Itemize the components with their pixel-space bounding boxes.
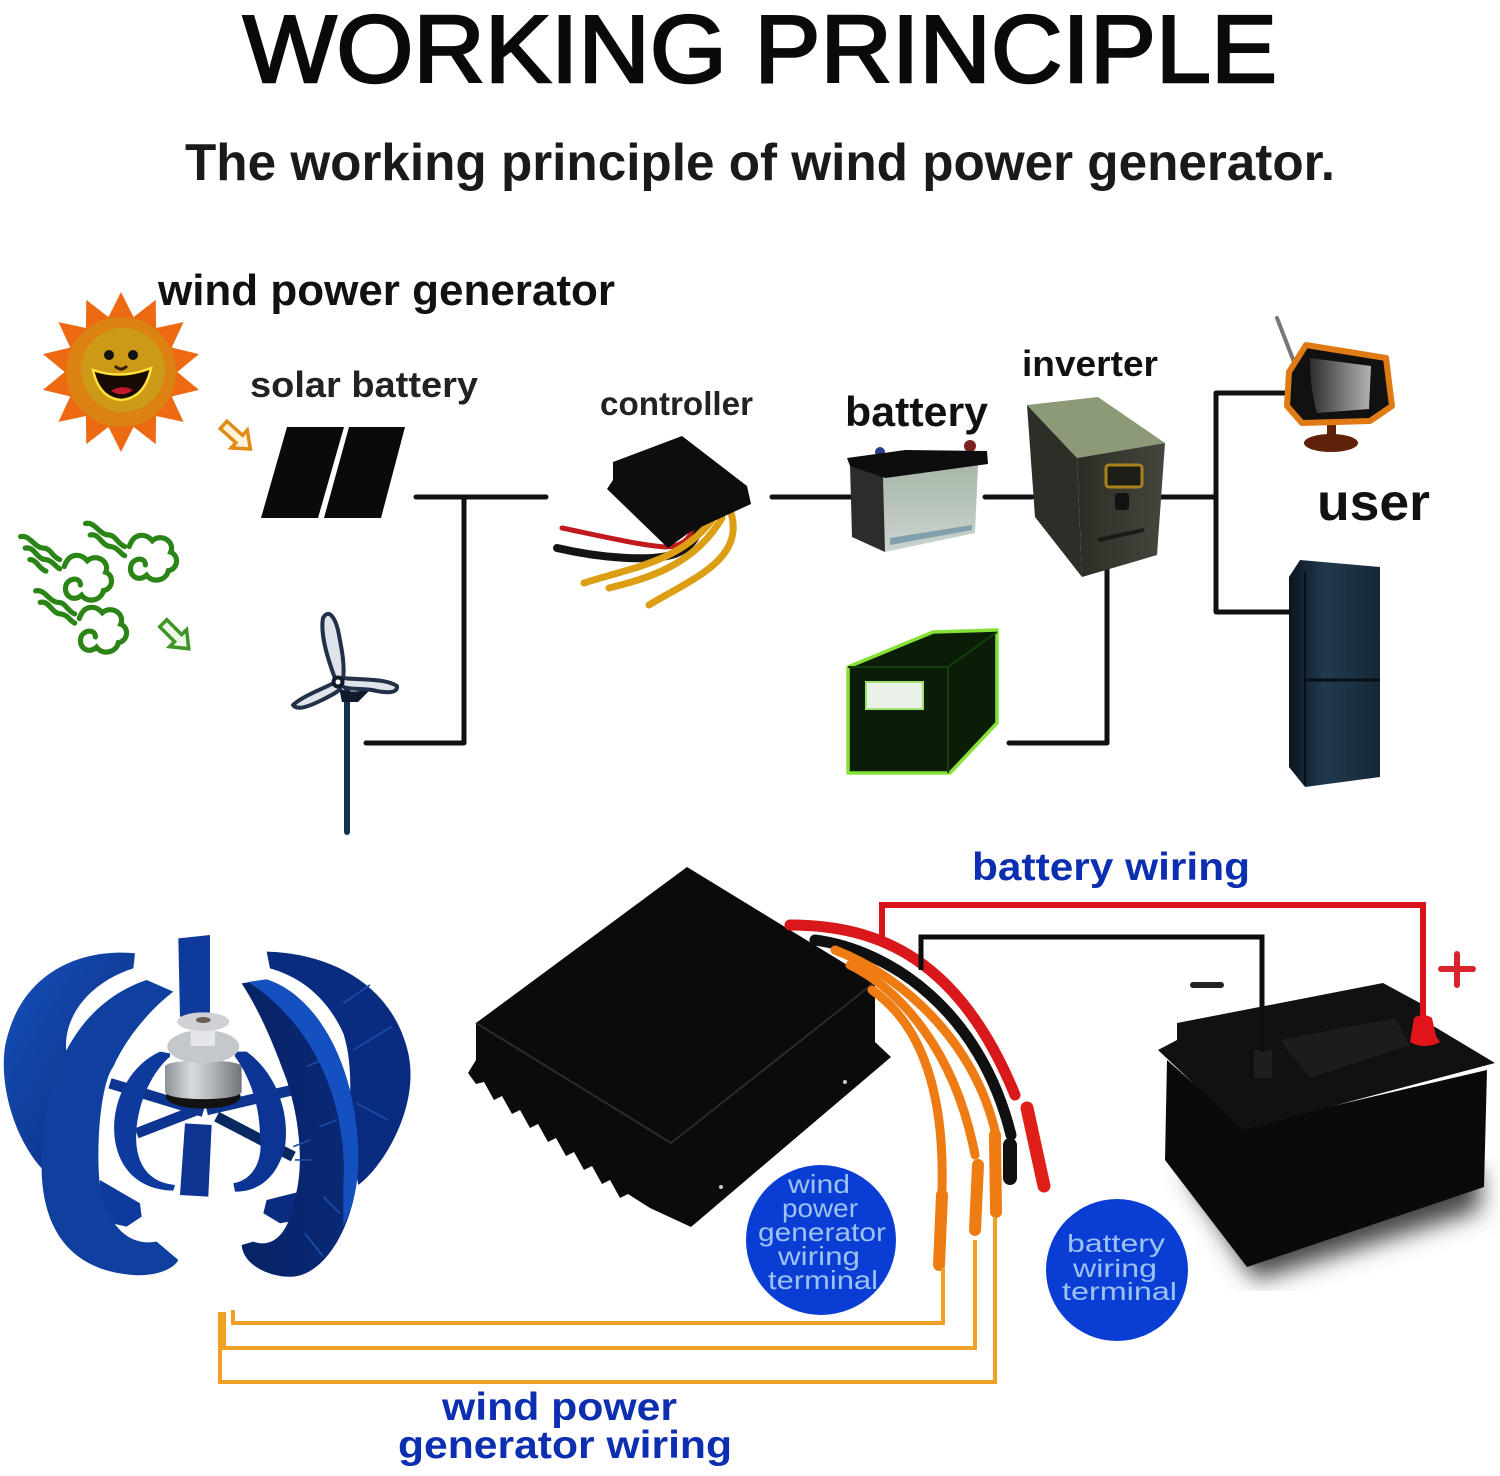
icon: television <box>1277 318 1392 452</box>
icon: vertical-axis wind turbine <box>4 935 411 1277</box>
label: controller: controller <box>600 385 753 422</box>
callout: wind power generator wiring terminal: generator <box>758 1217 886 1247</box>
connecting lines <box>366 393 1290 743</box>
lines: generator wiring <box>220 1218 995 1382</box>
callout: wind power generator wiring terminal: power <box>782 1193 858 1223</box>
icon: solar panels <box>261 427 405 518</box>
label: user: user <box>1317 474 1430 532</box>
arrow: wind to turbine <box>155 615 197 657</box>
callout: wind power generator wiring terminal <box>746 1165 896 1315</box>
symbol: plus <box>1441 954 1473 985</box>
callout: battery wiring terminal: wiring <box>1072 1255 1157 1283</box>
icon: backup battery box <box>848 630 997 773</box>
callout: battery wiring terminal: terminal <box>1062 1278 1177 1306</box>
icon: lead-acid battery <box>847 440 988 552</box>
line: battery negative wire <box>921 937 1262 1052</box>
icon: sun <box>40 292 202 452</box>
callout: wind power generator wiring terminal: wiring <box>777 1241 860 1271</box>
callout: wind power generator wiring terminal: terminal <box>768 1265 878 1295</box>
panel: wiring diagram <box>4 846 1495 1467</box>
wires: controller leads <box>790 925 1044 1265</box>
label: wind power generator wiring: wind power <box>441 1386 677 1429</box>
panel: system flow diagram <box>21 266 1430 832</box>
label: battery: battery <box>845 388 989 435</box>
label: wind power generator: wind power generator <box>157 266 615 315</box>
symbol: minus <box>1193 982 1221 988</box>
label: wind power generator wiring <box>398 1386 732 1467</box>
icon: red positive terminal <box>1410 1015 1440 1046</box>
icon: refrigerator <box>1289 560 1380 787</box>
callout: wind power generator wiring terminal: wind <box>787 1169 850 1199</box>
subtitle: The working principle of wind power generator. <box>185 134 1335 192</box>
arrow: sun to panel <box>216 416 258 458</box>
label: battery wiring: battery wiring <box>972 846 1250 889</box>
line: battery positive wire <box>882 905 1423 1016</box>
label: solar battery: solar battery <box>250 364 478 405</box>
icon: wind clouds <box>21 523 177 652</box>
icon: small wind turbine <box>293 614 397 832</box>
callout: battery wiring terminal <box>1046 1199 1188 1341</box>
icon: large controller <box>468 867 891 1227</box>
label: inverter: inverter <box>1022 343 1158 384</box>
callout: battery wiring terminal: battery <box>1067 1230 1166 1258</box>
icon: small controller <box>557 436 751 605</box>
icon: large battery <box>1158 983 1495 1280</box>
icon: inverter <box>1027 397 1165 577</box>
label: wind power generator wiring: generator wiring <box>398 1424 732 1467</box>
